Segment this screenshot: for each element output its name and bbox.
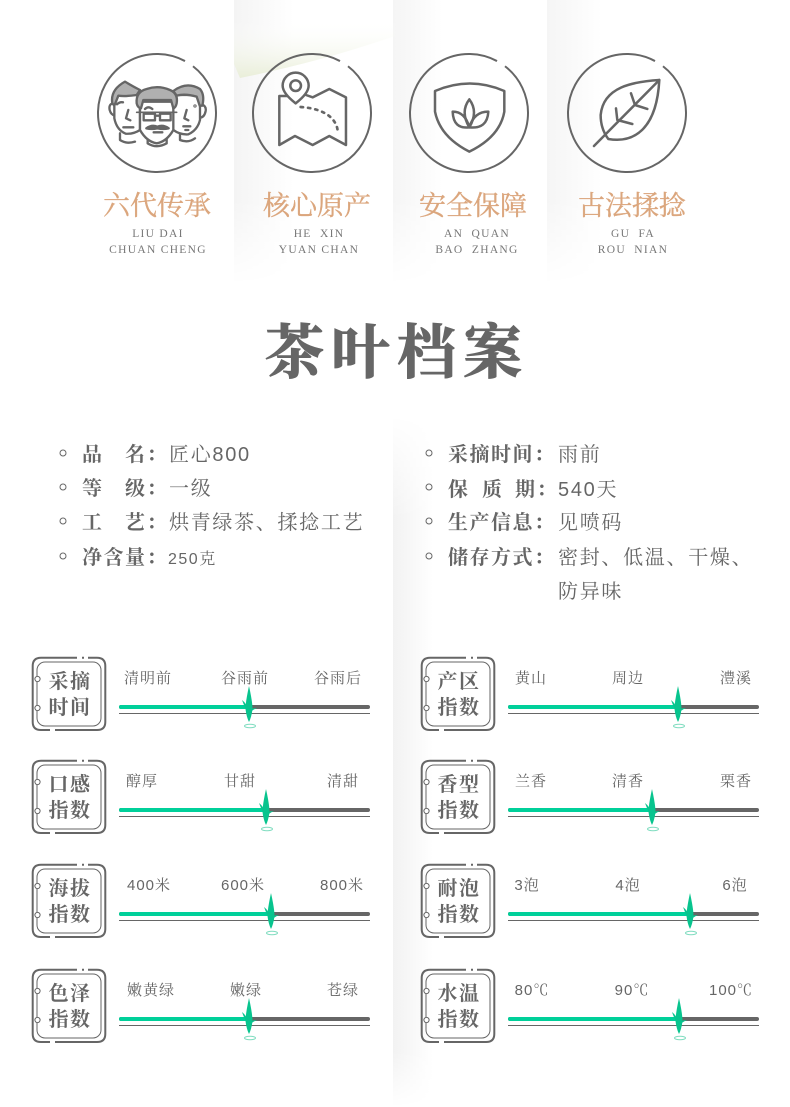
slider: 耐泡指数: 耐泡 bbox=[438, 877, 480, 900]
slider: 采摘时间: 时间 bbox=[48, 696, 92, 719]
panel: product info left: 级： bbox=[125, 477, 168, 500]
caption: 核心原产: 核心原产 bbox=[263, 191, 371, 221]
panel: product info left: 一级 bbox=[169, 477, 212, 500]
caption: 安全保障 bbox=[419, 191, 527, 256]
slider: 香型指数: 指数 bbox=[438, 799, 480, 822]
icon: map and pin bbox=[253, 54, 371, 172]
caption: 古法揉捻: 古法揉捻 bbox=[578, 191, 687, 221]
panel: product info right: 540天 bbox=[558, 479, 618, 501]
panel: product info left: 工 bbox=[82, 512, 104, 534]
slider: 色泽指数: 嫩绿 bbox=[230, 981, 262, 999]
panel: product info left: 艺： bbox=[125, 511, 168, 534]
slider: 水温指数: 指数 bbox=[438, 1008, 480, 1031]
caption: 古法揉捻: GU FA bbox=[611, 228, 655, 240]
panel: product info right: 储存方式： bbox=[448, 546, 556, 569]
slider: 耐泡指数: 3泡 bbox=[514, 877, 540, 894]
panel: product info right: 保 bbox=[448, 478, 470, 501]
panel: product info right: 生产信息： bbox=[448, 511, 556, 534]
slider: 采摘时间: 谷雨前 bbox=[221, 670, 269, 687]
slider: 色泽指数: 色泽 bbox=[48, 982, 92, 1005]
slider: 水温指数 bbox=[422, 970, 759, 1042]
slider: 海拔指数: 800米 bbox=[320, 877, 364, 894]
icon: six generations faces bbox=[98, 54, 216, 172]
panel: product info left: 匠心800 bbox=[169, 443, 251, 466]
slider: 采摘时间 bbox=[33, 658, 370, 730]
panel: product info left: 品 bbox=[82, 443, 104, 466]
caption: 六代传承 bbox=[103, 191, 211, 256]
slider: 水温指数: 80℃ bbox=[515, 982, 549, 999]
panel: product info right bbox=[426, 443, 753, 603]
panel: product info left: 等 bbox=[82, 477, 104, 500]
slider: 采摘时间: 清明前 bbox=[124, 670, 172, 687]
caption: 安全保障: 安全保障 bbox=[419, 191, 527, 221]
slider: 产区指数 bbox=[422, 658, 759, 730]
slider: 香型指数: 兰香 bbox=[515, 773, 547, 790]
icon: shield with leaves bbox=[410, 54, 528, 172]
slider: 海拔指数 bbox=[33, 865, 370, 937]
panel: product info right: 密封、低温、干燥、 bbox=[558, 546, 753, 569]
slider: 耐泡指数: 6泡 bbox=[722, 877, 748, 894]
panel: product info left: 名： bbox=[125, 443, 168, 466]
icon: tea leaf bbox=[568, 54, 686, 172]
slider: 香型指数: 栗香 bbox=[720, 773, 752, 790]
panel: product info right: 见喷码 bbox=[558, 511, 623, 534]
caption: 核心原产 bbox=[263, 191, 371, 256]
slider: 采摘时间: 谷雨后 bbox=[314, 670, 362, 687]
title: 茶叶档案 bbox=[265, 320, 529, 386]
slider: 香型指数 bbox=[422, 761, 759, 833]
panel: product info left: 净含量： bbox=[82, 546, 168, 569]
panel: product info left: 250克 bbox=[168, 550, 217, 568]
caption: 六代传承: CHUAN CHENG bbox=[109, 244, 207, 256]
slider: 产区指数: 产区 bbox=[438, 670, 480, 693]
slider: 产区指数: 黄山 bbox=[515, 669, 547, 687]
caption: 安全保障: AN QUAN bbox=[444, 228, 510, 240]
slider: 耐泡指数: 指数 bbox=[438, 903, 480, 926]
slider: 水温指数: 水温 bbox=[438, 982, 480, 1005]
caption: 六代传承: 六代传承 bbox=[103, 191, 211, 221]
slider: 海拔指数: 400米 bbox=[127, 877, 171, 894]
slider: 色泽指数: 嫩黄绿 bbox=[127, 981, 175, 999]
slider: 口感指数: 甘甜 bbox=[224, 773, 256, 790]
panel: product info left: 烘青绿茶、揉捻工艺 bbox=[169, 511, 364, 534]
slider: 采摘时间: 采摘 bbox=[48, 670, 92, 693]
slider: 产区指数: 指数 bbox=[438, 696, 480, 719]
slider: 水温指数: 100℃ bbox=[709, 982, 753, 999]
slider: 口感指数: 醇厚 bbox=[126, 773, 158, 790]
slider: 耐泡指数: 4泡 bbox=[615, 877, 641, 894]
slider: 海拔指数: 海拔 bbox=[48, 877, 92, 900]
panel: product info right: 雨前 bbox=[558, 443, 601, 466]
caption: 核心原产: YUAN CHAN bbox=[279, 244, 359, 256]
slider: 产区指数: 周边 bbox=[612, 670, 644, 687]
panel: product info right: 采摘时间： bbox=[448, 443, 556, 466]
slider: 口感指数: 指数 bbox=[48, 799, 92, 822]
slider: 口感指数: 清甜 bbox=[327, 773, 359, 790]
slider: 耐泡指数 bbox=[422, 865, 759, 937]
panel: product info right: 期： bbox=[515, 478, 558, 501]
pale green paper corner bbox=[234, 20, 395, 78]
slider: 海拔指数: 600米 bbox=[221, 877, 265, 894]
slider: 产区指数: 澧溪 bbox=[720, 669, 752, 687]
slider: 香型指数: 清香 bbox=[612, 773, 644, 790]
caption: 古法揉捻 bbox=[578, 191, 687, 256]
caption: 安全保障: BAO ZHANG bbox=[435, 244, 519, 256]
slider: 口感指数: 口感 bbox=[48, 772, 92, 796]
right face bbox=[173, 85, 206, 141]
slider: 色泽指数: 苍绿 bbox=[327, 981, 359, 999]
panel: product info left bbox=[60, 443, 364, 569]
panel: product info right: 质 bbox=[482, 478, 504, 501]
caption: 六代传承: LIU DAI bbox=[132, 228, 184, 240]
caption: 古法揉捻: ROU NIAN bbox=[598, 244, 668, 256]
panel: product info right: 防异味 bbox=[558, 580, 623, 603]
slider: 水温指数: 90℃ bbox=[615, 982, 649, 999]
caption: 核心原产: HE XIN bbox=[294, 228, 344, 240]
slider: 色泽指数: 指数 bbox=[48, 1008, 92, 1031]
slider: 口感指数 bbox=[33, 761, 370, 833]
slider: 海拔指数: 指数 bbox=[48, 903, 92, 926]
left face bbox=[109, 82, 140, 143]
slider: 香型指数: 香型 bbox=[438, 773, 480, 796]
centre face bbox=[137, 87, 177, 146]
slider: 色泽指数 bbox=[33, 970, 370, 1042]
